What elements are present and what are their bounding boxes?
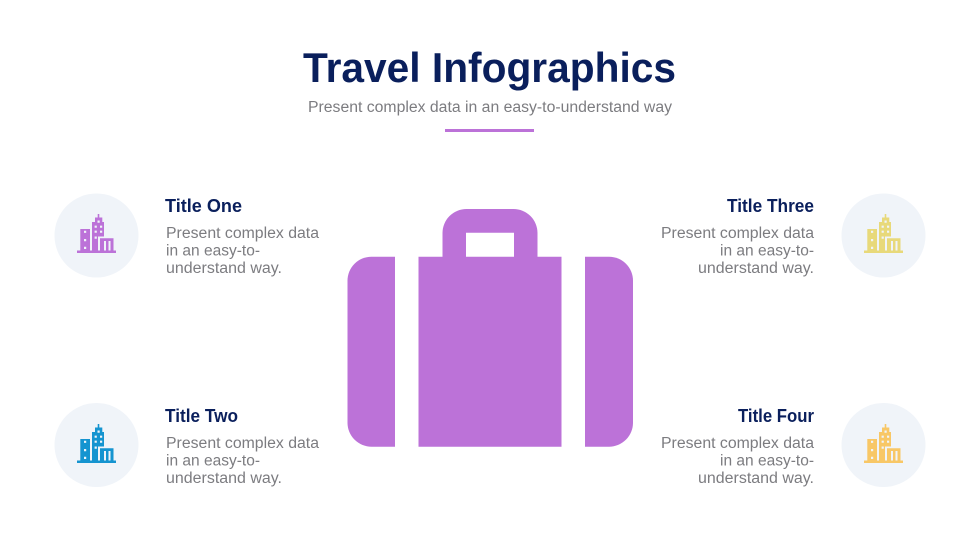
body text: understand way. <box>698 470 814 487</box>
body text <box>166 435 319 487</box>
panel: title four <box>661 403 926 487</box>
body text: in an easy-to- <box>166 452 260 470</box>
body text: understand way. <box>166 260 282 277</box>
subtitle: Present complex data in an easy-to-understand way <box>308 99 672 116</box>
title underline accent <box>445 129 534 132</box>
heading: Title One <box>165 196 242 216</box>
panel: title one <box>54 194 319 278</box>
body text <box>166 225 319 277</box>
body text <box>661 225 814 277</box>
icon: central suitcase <box>348 209 633 447</box>
heading: Title Two <box>165 406 238 426</box>
body text <box>661 435 814 487</box>
body text: Present complex data <box>166 435 319 452</box>
body text: in an easy-to- <box>720 242 814 260</box>
title: Travel Infographics <box>303 44 676 91</box>
body text: understand way. <box>166 470 282 487</box>
icon: blue city buildings <box>54 403 138 487</box>
body text: understand way. <box>698 260 814 277</box>
panel: title two <box>54 403 319 487</box>
body text: Present complex data <box>661 435 814 452</box>
icon: orange city buildings <box>842 403 926 487</box>
body text: Present complex data <box>166 225 319 242</box>
icon: yellow city buildings <box>842 194 926 278</box>
panel: title three <box>661 194 926 278</box>
body text: in an easy-to- <box>720 452 814 470</box>
icon: purple city buildings <box>54 194 138 278</box>
body text: in an easy-to- <box>166 242 260 260</box>
heading: Title Three <box>727 196 814 216</box>
body text: Present complex data <box>661 225 814 242</box>
heading: Title Four <box>738 406 814 426</box>
